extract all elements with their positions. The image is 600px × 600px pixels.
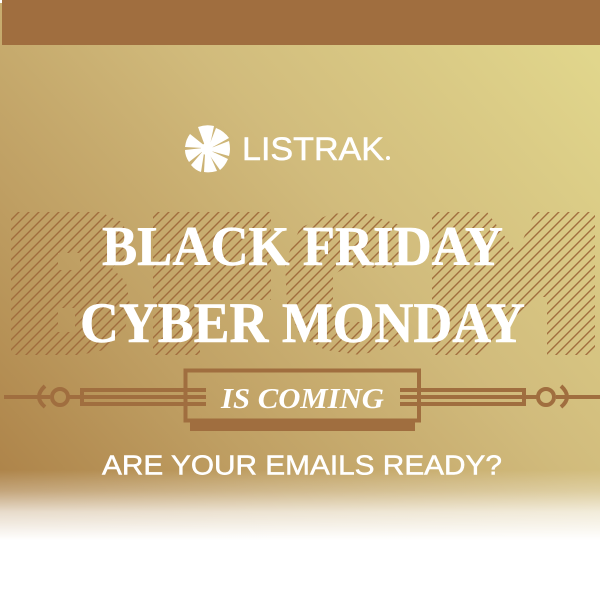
letter B (11, 212, 130, 355)
ornament: left connector (4, 386, 206, 407)
callout frame (186, 370, 419, 431)
logo: Listrak (185, 125, 390, 172)
letter F (153, 212, 271, 355)
tagline: ARE YOUR EMAILS READY? (102, 450, 502, 480)
ornament: right connector (400, 386, 600, 407)
top brown band (2, 0, 600, 45)
letter C (285, 212, 400, 355)
icon: starburst (185, 125, 230, 172)
registered mark (386, 156, 390, 160)
title: Black Friday: BLACK FRIDAY (102, 216, 503, 278)
title: Cyber Monday: CYBER MONDAY (80, 292, 525, 355)
wordmark: LISTRAK (242, 131, 384, 167)
letter M (432, 212, 595, 355)
hatched background letters BFCM (11, 212, 595, 355)
bottom white fade (0, 470, 600, 540)
callout text: IS COMING (220, 384, 384, 415)
